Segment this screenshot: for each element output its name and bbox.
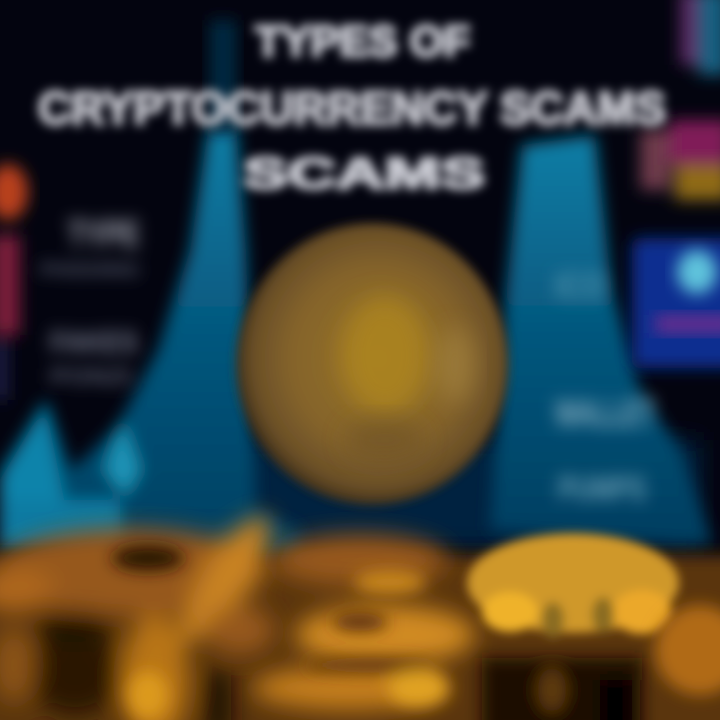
left text blocks bbox=[40, 213, 140, 389]
right text blocks bbox=[555, 265, 655, 508]
chart: left blue mountain peaks bbox=[0, 125, 300, 560]
left text blocks: FAKES bbox=[50, 326, 138, 359]
centre coin highlights bbox=[305, 570, 448, 706]
panel: right blue screen bbox=[632, 238, 720, 368]
left coin hole and bright highlight bbox=[112, 545, 184, 719]
left dark teal spire bbox=[210, 20, 236, 130]
left coin stack bbox=[0, 515, 274, 720]
chart: right blue mountain peaks bbox=[490, 135, 712, 545]
dark base under right coin bbox=[482, 658, 642, 720]
right text blocks: ICO bbox=[555, 265, 605, 306]
left text blocks: PONZI bbox=[50, 364, 132, 389]
title: TYPES OF bbox=[255, 17, 470, 66]
navy haze behind coin bbox=[220, 440, 700, 550]
panel: right colourful bars bbox=[640, 0, 720, 200]
central gold coin bbox=[236, 223, 508, 505]
title: CRYPTOCURRENCY SCAMS bbox=[38, 82, 666, 134]
gold coin pile bbox=[0, 515, 720, 720]
pile base glow bbox=[0, 555, 720, 720]
right text blocks: WALLET bbox=[555, 393, 655, 435]
left text blocks: PHISHING bbox=[40, 260, 140, 280]
panel: left red bar bbox=[0, 164, 28, 400]
title: SCAMS bbox=[243, 149, 485, 198]
centre coin stack bbox=[252, 534, 475, 710]
left text blocks: TYPE bbox=[68, 213, 140, 254]
right text blocks: PUMPS bbox=[558, 470, 646, 508]
title bbox=[38, 17, 666, 198]
right bright gold coin bbox=[467, 533, 679, 638]
far right gold stack bbox=[655, 605, 720, 695]
